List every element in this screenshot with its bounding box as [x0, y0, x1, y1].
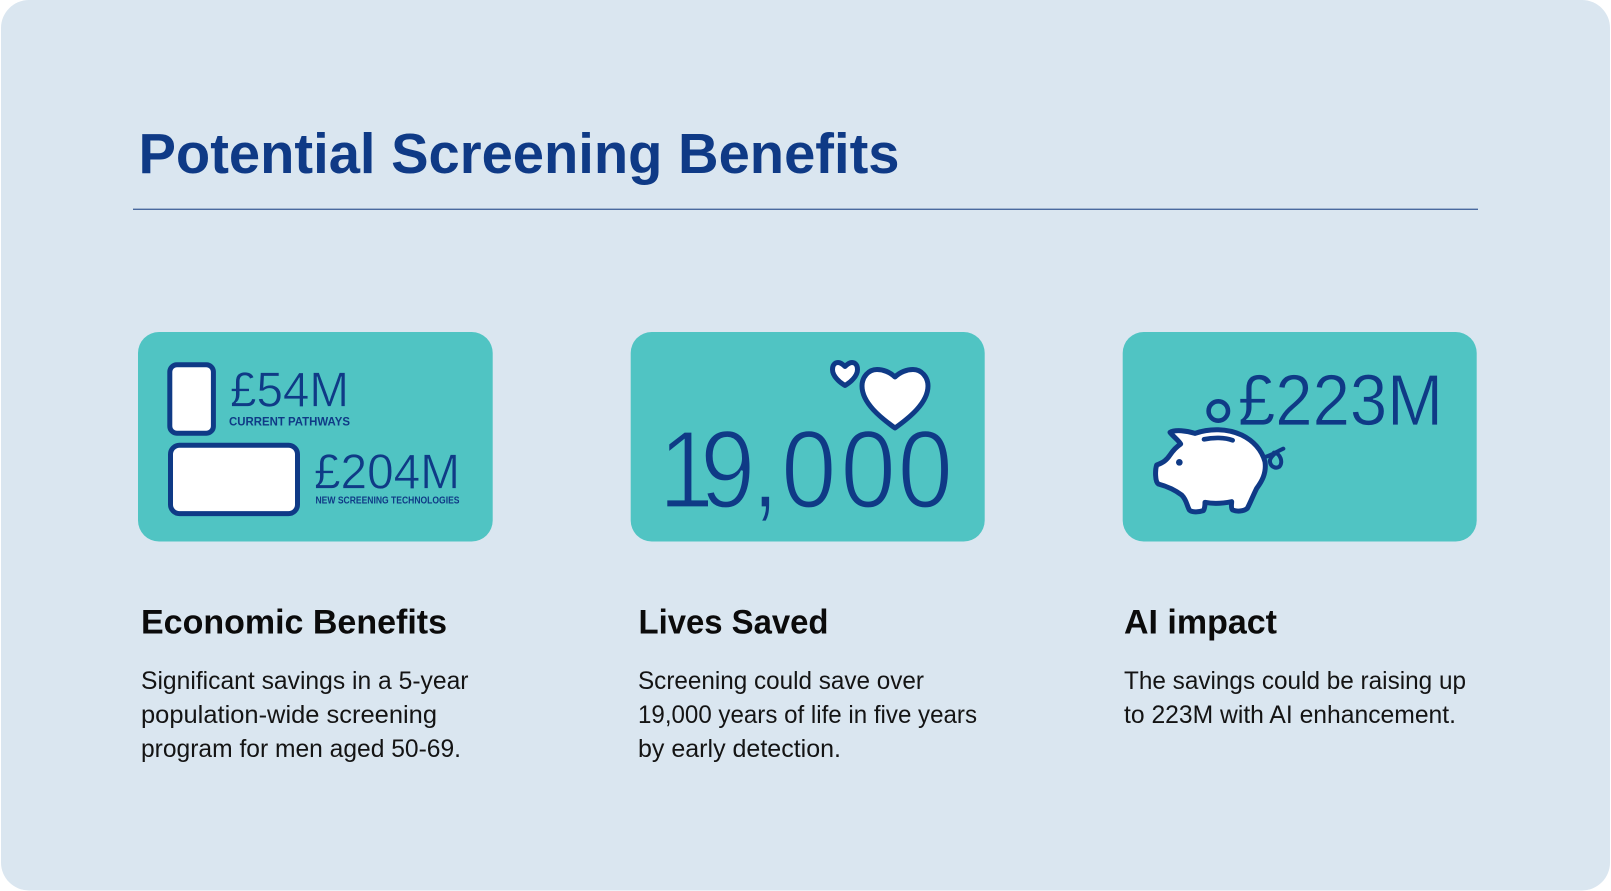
text block: AI impact [1124, 603, 1466, 729]
description: AI impact: The savings could be raising up [1124, 667, 1466, 695]
label: new screening technologies: NEW SCREENING TECHNOLOGIES [316, 496, 460, 507]
description: lives saved: by early detection. [638, 735, 841, 763]
description: AI impact [1124, 667, 1466, 729]
bar: current pathways [170, 365, 213, 433]
heading: economic benefits: Economic Benefits [141, 603, 447, 641]
value: 204M: £204M [314, 444, 460, 499]
description: lives saved: 19,000 years of life in five years [638, 701, 977, 729]
text block: lives saved [638, 603, 977, 763]
panel: AI impact [1123, 332, 1477, 542]
description: economic benefits: population-wide screening [141, 701, 437, 729]
description: economic benefits [141, 667, 468, 763]
description: economic benefits: Significant savings in a 5-year [141, 667, 468, 695]
card background [1123, 332, 1477, 542]
description: economic benefits: program for men aged 50-69. [141, 735, 461, 763]
description: lives saved [638, 667, 977, 763]
description: AI impact: to 223M with AI enhancement. [1124, 701, 1456, 729]
icon: small heart [832, 362, 858, 386]
description: lives saved: Screening could save over [638, 667, 924, 695]
panel: lives saved [631, 332, 985, 542]
bar: new screening technologies [170, 445, 298, 514]
card background [631, 332, 985, 542]
icon: large heart [862, 370, 928, 428]
value: 223M: £223M [1238, 360, 1443, 441]
value: 54M: £54M [230, 363, 349, 418]
heading: lives saved: Lives Saved [638, 603, 828, 641]
card background [138, 332, 493, 542]
label: current pathways: CURRENT PATHWAYS [229, 415, 350, 429]
heading: AI impact: AI impact [1124, 603, 1277, 641]
icon: piggy bank [1156, 430, 1283, 512]
text block: economic benefits [141, 603, 468, 763]
icon: coin [1209, 401, 1228, 421]
value: 19,000: 19,000 [659, 408, 953, 531]
title: Potential Screening Benefits [138, 122, 900, 186]
panel: economic benefits [138, 332, 493, 542]
